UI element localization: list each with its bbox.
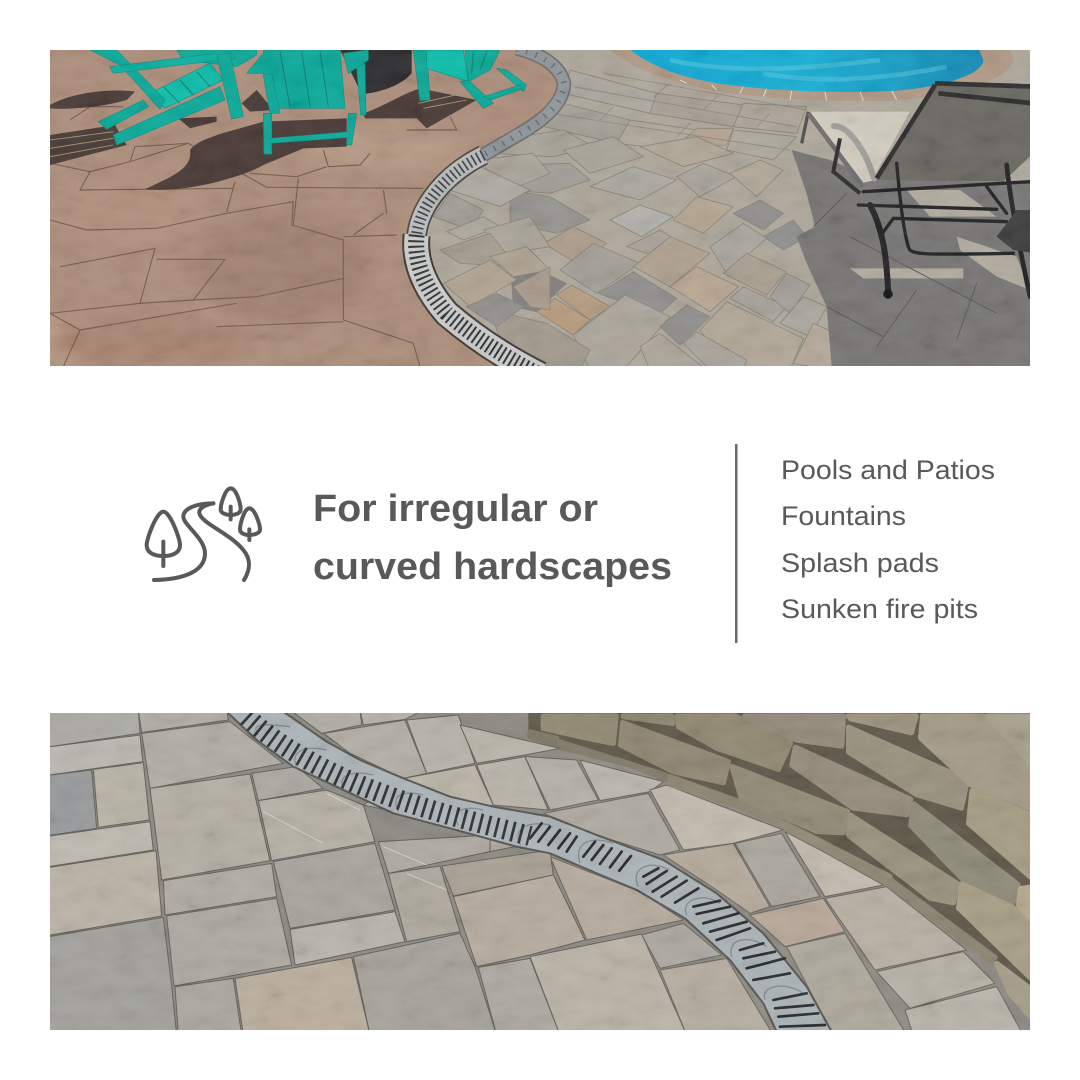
black fire pit cover	[339, 48, 412, 94]
pavers next to the drain	[484, 153, 550, 186]
chair shadows on concrete	[50, 88, 477, 190]
concrete patio area	[20, 48, 560, 370]
lounge chair shadow	[792, 150, 1030, 367]
pavers and pool area	[423, 43, 1043, 373]
pool coping	[607, 47, 1013, 101]
heading: curved hardscapes	[313, 546, 672, 588]
list of applications: Sunken fire pits	[781, 594, 978, 624]
list of applications: Fountains	[781, 501, 906, 531]
list of applications: Pools and Patios	[781, 455, 995, 485]
curved slot drain, top photo	[416, 48, 564, 375]
heading	[313, 488, 672, 588]
pool water	[628, 48, 983, 92]
photo: stamped concrete patio and paver pool deck with drain	[20, 43, 1043, 375]
retaining wall stones	[530, 716, 1033, 1017]
grey pavers, left half	[45, 710, 585, 1035]
photo: close-up of curved drain through pavers beside stone wall	[45, 710, 1033, 1035]
retaining wall and right-hand pavers	[525, 710, 1033, 1035]
concrete stamp joints	[50, 107, 457, 367]
teal chairs	[90, 50, 527, 154]
list of applications	[781, 455, 995, 624]
lounge chair	[802, 83, 1037, 299]
heading: For irregular or	[313, 488, 598, 530]
icon: winding path with three trees	[147, 488, 260, 580]
curved slot drain, bottom photo	[227, 712, 832, 1032]
list of applications: Splash pads	[781, 548, 939, 578]
